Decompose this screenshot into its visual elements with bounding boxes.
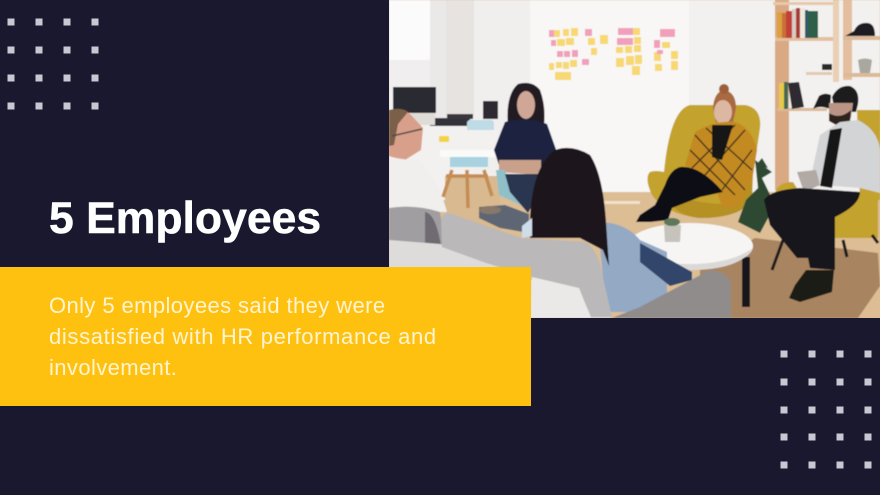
woven rug [700, 238, 880, 318]
back wall [389, 0, 880, 200]
yellow callout band [0, 267, 531, 406]
callout body text: involvement. [49, 355, 177, 380]
grey sofa [389, 207, 731, 318]
seated woman in navy shirt [494, 83, 559, 213]
woman in yellow plaid jacket [636, 84, 757, 222]
callout body text: Only 5 employees said they were [49, 293, 385, 318]
decorative dot grid bottom right [780, 350, 872, 468]
title: 5 Employees [49, 194, 321, 243]
woman with long dark hair and denim jacket [522, 148, 692, 312]
man in white shirt on sofa [389, 109, 447, 212]
yellow armchair left [647, 105, 760, 218]
wooden floor [445, 176, 880, 318]
round white coffee table [627, 223, 753, 307]
decorative dot grid top left [8, 18, 98, 110]
seated man in grey blazer [764, 86, 880, 302]
plant behind chair [738, 158, 775, 233]
callout body text: dissatisfied with HR performance and [49, 324, 437, 349]
office desk area and monitor [393, 87, 498, 167]
callout body text [49, 293, 437, 380]
yellow armchair right [772, 110, 880, 270]
wooden shelving with books and objects [773, 0, 880, 190]
photo: team meeting in an office [389, 0, 880, 318]
wall-mounted sticky notes [549, 28, 678, 80]
seated man's knee and hand [479, 205, 529, 233]
stool [443, 170, 492, 208]
potted succulent [664, 218, 681, 242]
